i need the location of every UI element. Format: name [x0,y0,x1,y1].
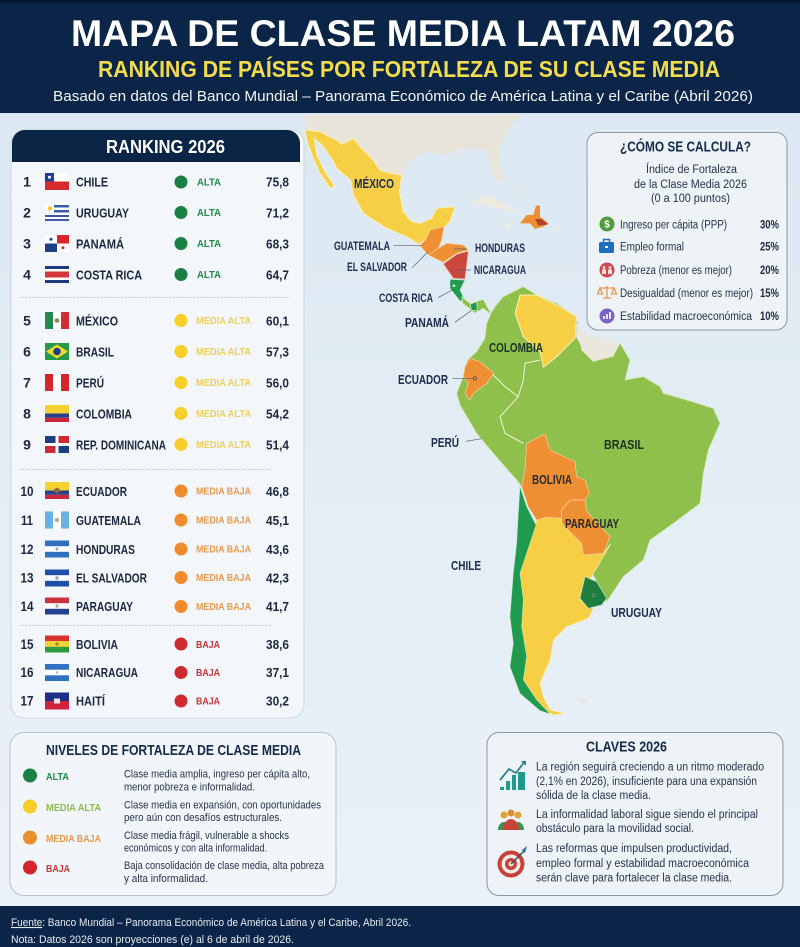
factor: pobreza: 20% [760,265,779,277]
row 13 El Salvador [20,570,289,586]
level: media alta: pero aún con desafíos estructurales. [124,812,282,824]
row 9 República Dominicana [23,436,290,453]
row 15 Bolivia: 15 [20,636,34,652]
row 4 Costa Rica: ALTA [197,269,221,281]
row 14 Paraguay: PARAGUAY [76,600,134,614]
key point 1: (2,1% en 2026), insuficiente para una expansión [536,776,757,788]
row 10 Ecuador: MEDIA BAJA [196,486,251,498]
label: Guatemala: GUATEMALA [334,241,390,253]
country: Guatemala [420,227,444,255]
level: alta: Clase media amplia, ingreso per cápita alto, [124,768,310,780]
row 8 Colombia: 54,2 [266,406,289,422]
label: Perú: PERÚ [431,435,459,450]
key point 3: empleo formal y estabilidad macroeconómica [536,858,750,870]
label: Brasil: BRASIL [604,437,644,452]
row 3 Panamá: ALTA [197,238,221,250]
row 3 Panamá: 68,3 [266,236,289,252]
level: baja: y alta informalidad. [124,873,208,885]
factor: estabilidad macroeconómica: Estabilidad macroeconómica [620,311,753,323]
country: Paraguay [562,500,610,555]
panel: claves 2026 [487,732,783,896]
level: media alta: MEDIA ALTA [46,802,101,814]
row 10 Ecuador: ECUADOR [76,485,127,499]
row 12 Honduras: MEDIA BAJA [196,544,251,556]
label: Panamá: PANAMÁ [405,315,449,330]
icon: growth chart [500,761,526,790]
row 17 Haití: 17 [20,692,34,708]
key point 2: La informalidad laboral sigue siendo el principal [536,809,758,821]
header banner [0,0,800,113]
row 16 Nicaragua: NICARAGUA [76,666,138,680]
row 9 República Dominicana: MEDIA ALTA [196,439,251,451]
label: Nicaragua: NICARAGUA [474,265,526,277]
country: Panama [462,297,492,315]
row 16 Nicaragua: 37,1 [266,665,289,680]
key point 2 [536,809,758,835]
title: MAPA DE CLASE MEDIA LATAM 2026 [71,13,735,54]
row 16 Nicaragua: BAJA [196,667,220,679]
row 3 Panamá: 3 [23,236,31,252]
row 16 Nicaragua [20,664,289,681]
row 17 Haití: 30,2 [266,694,289,708]
index description: (0 a 100 puntos) [651,193,730,205]
island: Jamaica [502,223,512,228]
level: alta [23,768,310,794]
label: Chile: CHILE [451,558,481,573]
key point 3: serán clave para fortalecer la clase media. [536,872,732,884]
row 12 Honduras: 43,6 [266,542,289,557]
label: México: MÉXICO [354,176,394,191]
level: media baja: MEDIA BAJA [46,833,101,845]
row 8 Colombia: 8 [23,406,31,422]
island: Falklands [577,698,588,703]
factor: pobreza: Pobreza (menor es mejor) [620,265,732,277]
row 13 El Salvador: EL SALVADOR [76,572,147,586]
row 16 Nicaragua: 16 [20,664,34,680]
row 3 Panamá: PANAMÁ [76,236,124,252]
label: Uruguay: URUGUAY [611,605,662,620]
factor: ingreso per cápita: Ingreso per cápita (PPP) [620,220,727,232]
label: Costa Rica: COSTA RICA [379,293,433,305]
subtitle: RANKING DE PAÍSES POR FORTALEZA DE SU CLASE MEDIA [98,55,720,82]
country: Bolivia [522,434,589,520]
factor: empleo formal [599,240,779,254]
key point 3: Las reformas que impulsen productividad, [536,843,732,855]
country: Mexico [305,130,455,244]
row 3 Panamá [23,235,289,252]
row 12 Honduras [20,540,289,558]
row 13 El Salvador: 42,3 [266,570,289,586]
index description [634,163,747,205]
calculation heading: ¿CÓMO SE CALCULA? [620,138,751,156]
level: baja [23,860,325,885]
row 15 Bolivia: BAJA [196,639,220,651]
row 2 Uruguay: 2 [23,204,31,220]
row 8 Colombia: MEDIA ALTA [196,408,251,420]
row 14 Paraguay: 14 [20,598,34,614]
panel: niveles de fortaleza [10,732,336,896]
key point 3 [536,843,750,884]
key point 1: sólida de la clase media. [536,790,651,802]
row 10 Ecuador [20,482,289,499]
country: Argentina [520,517,611,715]
row 11 Guatemala: GUATEMALA [76,514,141,528]
country: Costa Rica [450,279,465,301]
row 1 Chile: ALTA [197,176,221,188]
factor: pobreza [600,262,779,278]
factor: estabilidad macroeconómica: 10% [760,311,779,323]
row 13 El Salvador: 13 [20,570,34,586]
island: Cuba [472,195,521,214]
row 2 Uruguay: 71,2 [266,206,289,220]
row 15 Bolivia [20,636,289,652]
row 4 Costa Rica: 4 [23,266,31,282]
row 9 República Dominicana: 51,4 [266,438,290,452]
level: baja: BAJA [46,863,70,875]
row 11 Guatemala: 11 [21,512,33,528]
row 5 México: MÉXICO [76,314,118,328]
factor: desigualdad: Desigualdad (menor es mejor) [620,288,753,300]
label: Ecuador: ECUADOR [398,372,448,387]
land: Guianas [576,323,620,362]
level: media alta [23,800,321,824]
row 2 Uruguay [23,204,289,221]
row 4 Costa Rica [23,266,289,283]
row 15 Bolivia: 38,6 [266,637,289,652]
index description: de la Clase Media 2026 [634,179,747,191]
row 12 Honduras: 12 [20,541,34,557]
row 11 Guatemala [21,512,289,528]
row 13 El Salvador: MEDIA BAJA [196,572,251,584]
islands: Bahamas [507,177,522,195]
key point 1 [536,762,764,802]
level: baja: Baja consolidación de clase media, alta pobreza [124,860,325,872]
niveles heading: NIVELES DE FORTALEZA DE CLASE MEDIA [46,742,301,759]
row 1 Chile: CHILE [76,176,108,190]
row 5 México: 5 [23,312,31,328]
label: Honduras: HONDURAS [475,243,525,255]
row 14 Paraguay [20,598,289,614]
level: alta: ALTA [46,771,69,783]
panel: ¿cómo se calcula? [587,132,787,330]
country: Chile [510,487,550,714]
row 6 Brasil: BRASIL [76,346,114,360]
icon: people group [498,810,524,830]
label: Paraguay: PARAGUAY [565,516,619,531]
row 14 Paraguay: MEDIA BAJA [196,601,251,613]
row 2 Uruguay: URUGUAY [76,206,130,220]
row 5 México [23,312,289,329]
row 2 Uruguay: ALTA [197,207,221,219]
country: Nicaragua [443,251,468,279]
claves heading: CLAVES 2026 [586,738,667,756]
land: United States [305,115,522,182]
projection note: Nota: Datos 2026 son proyecciones (e) al 6 de abril de 2026. [11,934,294,946]
row 7 Perú: 56,0 [266,376,289,390]
row 7 Perú: PERÚ [76,376,104,390]
row 5 México: 60,1 [266,314,289,328]
country: Honduras and El Salvador [428,243,468,262]
row 7 Perú [23,374,289,391]
row 6 Brasil [23,343,289,360]
row 7 Perú: MEDIA ALTA [196,377,251,389]
index description: Índice de Fortaleza [646,163,738,176]
label: Bolivia: BOLIVIA [532,472,572,487]
row 8 Colombia: COLOMBIA [76,408,132,422]
icon: target [498,846,527,878]
row 1 Chile: 75,8 [266,174,289,190]
row 9 República Dominicana: REP. DOMINICANA [76,438,166,452]
row 9 República Dominicana: 9 [23,436,31,452]
factor: empleo formal: 25% [760,242,779,254]
row 6 Brasil: 6 [23,344,31,360]
row 10 Ecuador: 46,8 [266,484,289,499]
level: media alta: Clase media en expansión, con oportunidades [124,800,321,812]
factor: estabilidad macroeconómica [600,308,779,324]
panel: ranking 2026 [11,130,304,718]
country: Brazil, Colombia and Peru [457,287,720,602]
country: Ecuador [463,358,494,400]
source line: Basado en datos del Banco Mundial – Panorama Económico de América Latina y el Caribe (Abril 2026) [53,88,753,105]
level: alta: menor pobreza e informalidad. [124,782,255,794]
country: Venezuela [515,295,577,367]
row 4 Costa Rica: 64,7 [266,268,289,282]
row 12 Honduras: HONDURAS [76,543,135,557]
row 7 Perú: 7 [23,374,31,390]
row 4 Costa Rica: COSTA RICA [76,268,142,282]
row 15 Bolivia: BOLIVIA [76,638,118,652]
borders: Colombia, Peru and Brazil [493,360,540,443]
row 11 Guatemala: MEDIA BAJA [196,514,251,526]
row 1 Chile: 1 [23,174,31,190]
row 5 México: MEDIA ALTA [196,315,251,327]
row 17 Haití: BAJA [196,696,220,708]
map labels: leader lines Central America [393,246,473,322]
factor: ingreso per cápita [600,216,779,232]
key point 1: La región seguirá creciendo a un ritmo moderado [536,762,764,774]
row 6 Brasil: MEDIA ALTA [196,346,251,358]
factor: ingreso per cápita: $ [604,220,610,230]
factor: ingreso per cápita: 30% [760,220,779,232]
level: media baja: Clase media frágil, vulnerable a shocks [124,830,289,842]
row 17 Haití [20,692,289,710]
factor: desigualdad: 15% [760,288,779,300]
map of Latin America [305,115,720,715]
row 14 Paraguay: 41,7 [266,599,289,614]
footer [0,906,800,947]
ranking heading: RANKING 2026 [106,137,225,157]
row 8 Colombia [23,405,289,422]
level: media baja [23,830,289,854]
row 1 Chile [23,173,289,190]
label: Colombia: COLOMBIA [489,340,543,355]
island: Haiti and Dominican Republic [520,206,548,229]
level: media baja: económicos y con alta informalidad. [124,842,267,854]
row 17 Haití: HAITÍ [76,694,105,708]
leader lines South America [453,379,482,441]
label: El Salvador: EL SALVADOR [347,262,408,274]
source note: Fuente: Banco Mundial – Panorama Económico de América Latina y el Caribe, Abril 2026. [11,917,411,929]
country: Uruguay [580,577,607,608]
factor: empleo formal: Empleo formal [620,242,684,254]
row 6 Brasil: 57,3 [266,344,289,360]
row 10 Ecuador: 10 [20,483,34,499]
key point 2: obstáculo para la movilidad social. [536,823,694,835]
row 11 Guatemala: 45,1 [266,513,289,528]
